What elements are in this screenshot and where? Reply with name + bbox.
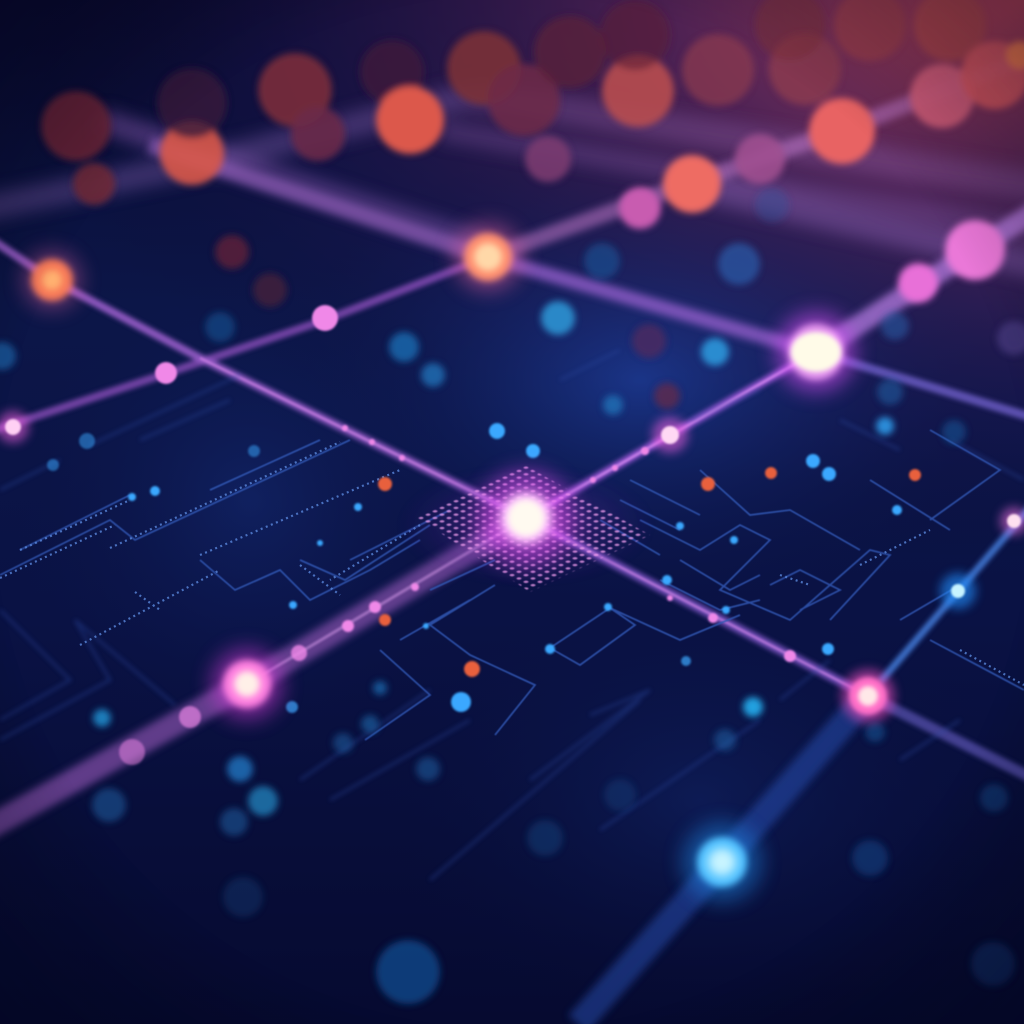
glowing node: orange top centre [454, 223, 522, 291]
blurred foreground traces [0, 350, 1024, 880]
far blurred light beams [0, 95, 1024, 270]
circuit traces [0, 430, 1024, 740]
glowing node: cyan right [940, 573, 976, 609]
glowing node: blue bottom [682, 822, 762, 902]
glowing node: small pink [0, 411, 1024, 535]
glowing node: centre [478, 470, 574, 566]
pink dots along beams [119, 305, 796, 765]
dotted data traces [0, 442, 1024, 685]
glowing node: orange left [22, 250, 82, 310]
small sharp circuit dots [47, 423, 921, 713]
glowing node: upper right [776, 312, 856, 392]
blurred bokeh lights: red [41, 0, 1024, 409]
glowing node: lower right [841, 669, 895, 723]
glowing node: lower left [211, 648, 283, 720]
blurred bokeh lights: blue [0, 188, 1015, 1004]
central chip grid [396, 463, 656, 592]
